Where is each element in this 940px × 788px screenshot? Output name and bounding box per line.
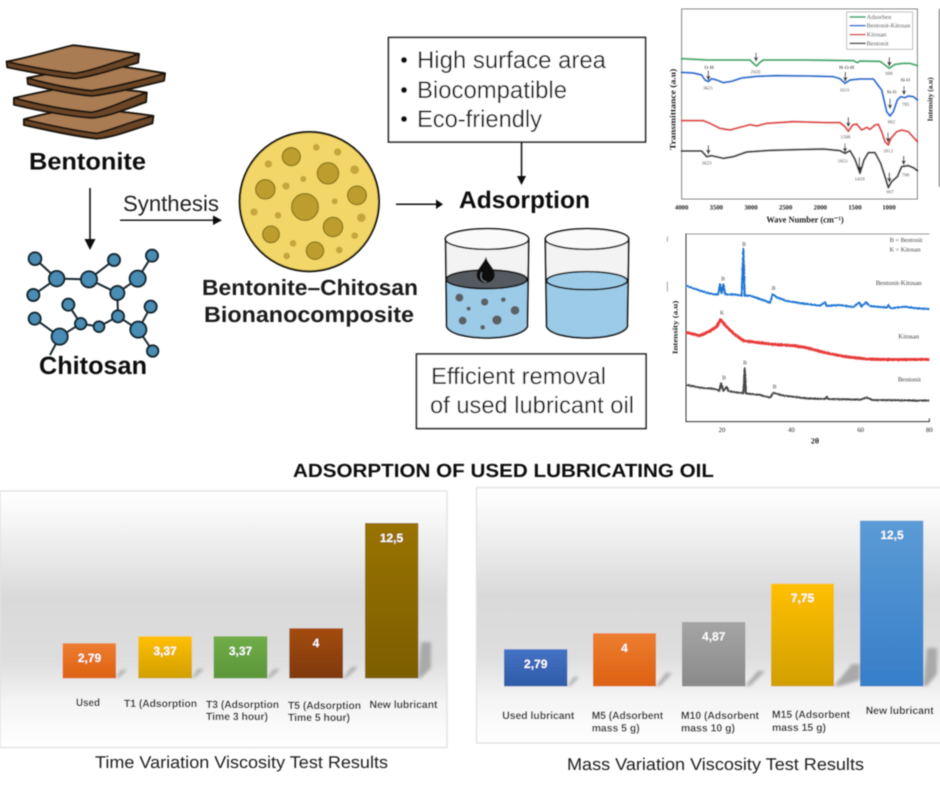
category labels: New lubricant <box>370 699 438 711</box>
value labels: 4,87 <box>702 630 726 644</box>
arrow: synthesis <box>120 216 222 225</box>
XRD peak and series labels: K <box>720 309 724 316</box>
FTIR axes text: 3500 <box>710 204 723 211</box>
label: Synthesis: Synthesis <box>123 191 219 216</box>
caption: time variation: Time Variation Viscosity Test Results <box>95 753 388 772</box>
XRD axes text: 40 <box>788 426 795 434</box>
FTIR legend: Adsorben <box>867 14 891 21</box>
FTIR axes text: 1000 <box>882 204 896 211</box>
arrow: properties to adsorption <box>517 142 526 185</box>
XRD peak and series labels: B <box>722 374 726 381</box>
FTIR axes text: 4000 <box>675 204 688 211</box>
value labels <box>524 528 904 671</box>
XRD peak and series labels: Kitosan <box>898 333 919 340</box>
FTIR legend: Kitosan <box>867 31 887 38</box>
XRD axes text: Intensity (a.u) <box>671 301 679 354</box>
XRD axes text: 2θ <box>811 437 819 445</box>
FTIR curves <box>682 59 917 188</box>
category labels <box>502 705 934 735</box>
FTIR peak labels: 997 <box>886 190 894 195</box>
heading: Bentonite–Chitosan Bionanocomposite <box>202 275 418 327</box>
value labels: 2,79 <box>524 657 548 671</box>
value labels: 2,79 <box>78 651 102 665</box>
FTIR peak labels: 1631 <box>840 88 850 93</box>
value labels: 7,75 <box>791 591 815 605</box>
XRD peak and series labels: B = Bentonit <box>890 237 923 244</box>
category labels: mass 5 g) <box>592 723 640 735</box>
icon: bentonite-chitosan composite sphere <box>240 132 379 271</box>
heading: Bentonite–Chitosan Bionanocomposite: Bentonite–Chitosan <box>202 275 418 300</box>
XRD peak and series labels: B <box>743 359 747 366</box>
FTIR axes text: 1500 <box>848 204 862 211</box>
box: properties: High surface area <box>417 47 607 74</box>
value labels: 4 <box>313 636 320 650</box>
category labels: mass 10 g) <box>681 723 735 735</box>
category labels: T3 (Adsorption <box>206 699 279 711</box>
value labels <box>78 531 404 665</box>
FTIR legend: Bentonit <box>867 40 889 47</box>
FTIR peak labels: 3623 <box>702 160 712 166</box>
FTIR peak labels: 790 <box>902 173 909 178</box>
FTIR axes text: Wave Number (cm⁻¹) <box>766 215 844 225</box>
chart: FTIR spectra <box>668 9 939 225</box>
FTIR axes text: 2000 <box>814 204 827 211</box>
box: efficient removal: of used lubricant oil <box>430 392 634 418</box>
FTIR peak arrows <box>707 53 906 181</box>
heading: Bentonite–Chitosan Bionanocomposite: Bionanocomposite <box>204 302 414 327</box>
XRD peak and series labels: K = Kitosan <box>889 246 921 253</box>
category labels: Used lubricant <box>502 710 575 722</box>
value labels: 4 <box>621 641 628 655</box>
XRD peak and series labels: B <box>773 383 777 390</box>
FTIR axes text: Transmittance (a.u) <box>668 69 677 150</box>
box: properties: Eco-friendly <box>417 106 542 133</box>
box: properties <box>388 38 646 142</box>
XRD axes text: 80 <box>926 426 933 434</box>
XRD axes text: 20 <box>719 426 725 434</box>
heading: Bentonite: Bentonite <box>29 148 146 176</box>
box: efficient removal: Efficient removal <box>431 363 606 389</box>
title: ADSORPTION OF USED LUBRICATING OIL <box>293 461 714 482</box>
FTIR peak labels: Si-O <box>887 90 897 95</box>
category labels: M15 (Adsorbent <box>772 709 850 721</box>
XRD axes text <box>671 301 933 445</box>
XRD peak and series labels: Bentonit <box>898 376 921 383</box>
XRD axes text: 60 <box>857 426 864 434</box>
bars <box>63 643 116 678</box>
FTIR peak labels: O-H <box>704 65 714 70</box>
category labels: T5 (Adsorption <box>288 700 361 712</box>
FTIR axes text: Intensity (a.u) <box>926 77 934 121</box>
panel: time variation chart <box>0 491 447 748</box>
FTIR peak labels <box>702 65 910 195</box>
FTIR legend: Bentonit-Kitosan <box>867 22 910 29</box>
icon: chitosan molecule network <box>27 250 158 357</box>
category labels: M10 (Adsorbent <box>681 710 759 722</box>
FTIR peak labels: H-O-H <box>839 65 854 70</box>
category labels: Time 5 hour) <box>288 712 350 724</box>
caption: mass variation: Mass Variation Viscosity Test Results <box>567 755 864 774</box>
category labels: T1 (Adsorption <box>124 698 197 710</box>
icon: beaker with oil layer and particles <box>445 229 529 338</box>
value labels: 12,5 <box>880 528 904 542</box>
box: properties: Biocompatible <box>417 77 567 104</box>
FTIR legend <box>847 12 913 49</box>
heading: Adsorption: Adsorption <box>459 187 590 214</box>
chart: XRD patterns <box>667 233 933 445</box>
XRD peak and series labels <box>720 237 923 390</box>
XRD peak and series labels: B <box>742 241 746 247</box>
arrow: sphere to adsorption <box>396 200 443 209</box>
category labels: Time 3 hour) <box>206 711 268 723</box>
category labels: mass 15 g) <box>772 722 826 734</box>
XRD peak and series labels: B <box>772 285 776 291</box>
panel: mass variation chart <box>476 488 940 743</box>
category labels: Used <box>76 697 100 709</box>
XRD peak and series labels: B <box>721 275 725 282</box>
FTIR peak labels: 785 <box>902 102 909 107</box>
heading: Chitosan: Chitosan <box>39 352 147 380</box>
FTIR axes text: 2500 <box>779 204 792 211</box>
FTIR axes text <box>668 69 934 225</box>
category labels: New lubricant <box>866 705 934 717</box>
FTIR peak labels: 1419 <box>855 177 865 182</box>
arrow: bentonite to chitosan <box>84 188 96 250</box>
XRD curves <box>686 249 929 401</box>
value labels: 3,37 <box>229 644 253 658</box>
FTIR peak labels: 3621 <box>703 86 713 91</box>
FTIR peak labels: 1598 <box>840 134 850 140</box>
bar shadows <box>116 642 431 678</box>
category labels <box>76 697 438 724</box>
FTIR peak labels: 988 <box>885 71 893 76</box>
box: efficient removal <box>416 354 646 428</box>
FTIR peak labels: 2920 <box>750 69 760 75</box>
value labels: 3,37 <box>153 644 177 658</box>
category labels: M5 (Adsorbent <box>592 710 664 722</box>
bars <box>504 649 567 686</box>
value labels: 12,5 <box>380 531 404 545</box>
FTIR axes text: 3000 <box>744 204 758 211</box>
FTIR peak labels: 992 <box>888 120 895 125</box>
bar shadows <box>567 648 937 686</box>
FTIR peak labels: 1653 <box>837 158 847 164</box>
icon: beaker with clean water <box>545 229 629 338</box>
FTIR peak labels: Si-O <box>900 77 910 83</box>
FTIR peak labels: 1012 <box>883 149 893 154</box>
icon: bentonite layered plates <box>7 45 165 139</box>
XRD peak and series labels: Bentonit-Kitosan <box>876 279 922 287</box>
